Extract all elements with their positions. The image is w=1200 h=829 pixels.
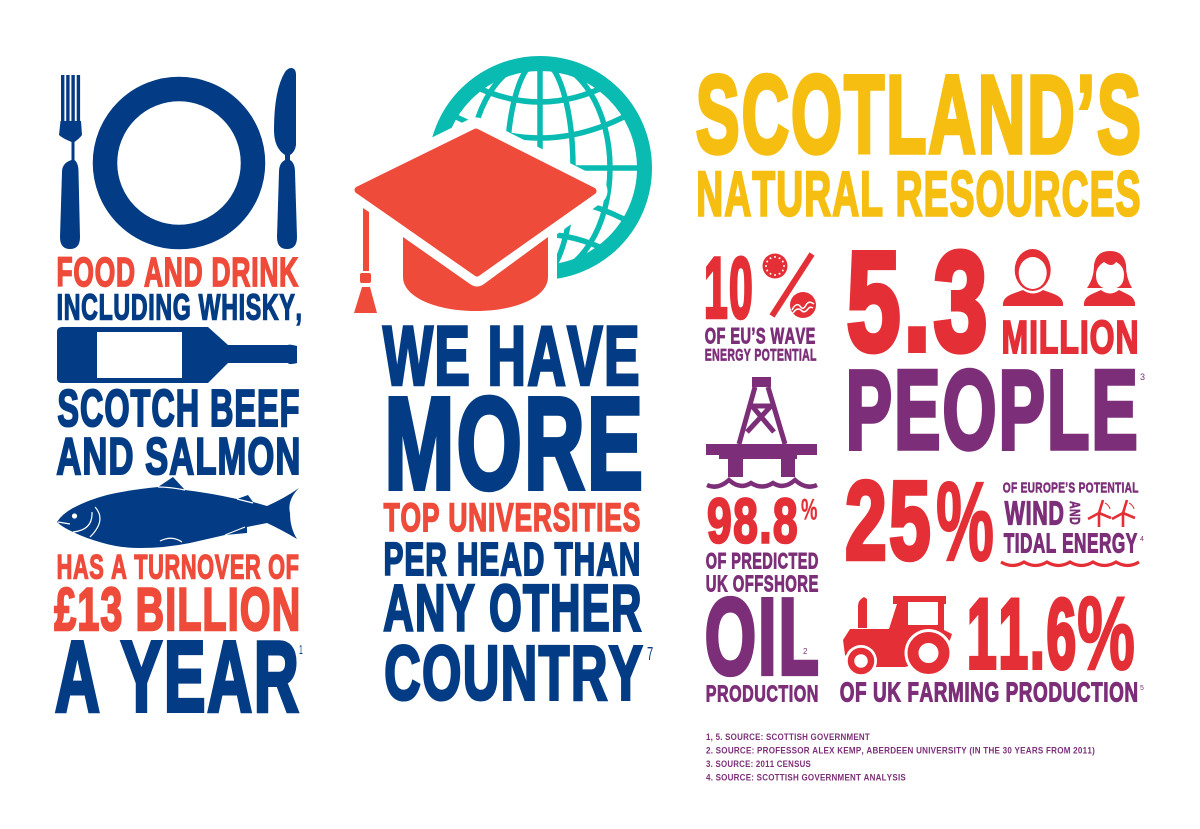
footnotes: 1, 5. SOURCE: SCOTTISH GOVERNMENT (706, 732, 870, 743)
icon: mortarboard (358, 132, 593, 273)
text: 98.8 percent: 98.8 (707, 487, 799, 557)
text: a year: A YEAR (55, 621, 301, 733)
text: oil: OIL (705, 576, 821, 697)
footnotes: 4. SOURCE: SCOTTISH GOVERNMENT ANALYSIS (706, 772, 906, 784)
footnote marker 3: 3 (1140, 372, 1145, 382)
text: of Europe's potential: OF EUROPE’S POTENTIAL (1003, 480, 1139, 497)
infographic canvas (54, 56, 1145, 780)
footnote marker 5: 5 (1140, 685, 1144, 692)
stat: offshore oil (705, 377, 821, 706)
text: any other: ANY OTHER (383, 571, 643, 645)
text: energy potential: ENERGY POTENTIAL (705, 347, 817, 365)
panel: natural resources (696, 53, 1145, 784)
icon: fork (59, 75, 82, 249)
panel: food and drink (54, 68, 303, 733)
text: of predicted: OF PREDICTED (706, 549, 819, 574)
icon: globe and graduation cap (354, 60, 650, 313)
footnotes (706, 732, 1095, 784)
text: 25 percent: % (936, 459, 996, 584)
text: UK offshore: UK OFFSHORE (706, 570, 819, 596)
icon: tractor (843, 596, 952, 677)
icon: salmon (57, 477, 299, 548)
icon: woman (1084, 251, 1135, 306)
text: 11.6 percent: % (1077, 576, 1137, 692)
text: per head than: PER HEAD THAN (384, 533, 641, 585)
icon: globe (430, 60, 650, 280)
stat: wind and tidal (845, 458, 1144, 584)
footnote marker 4: 4 (1140, 536, 1144, 543)
icon: man (1003, 249, 1063, 306)
icon: cap base (403, 237, 548, 311)
panel: top universities (354, 60, 654, 716)
text: scotch beef: SCOTCH BEEF (57, 380, 300, 438)
stat: wave energy: 10 (704, 240, 754, 336)
stat: wave energy (704, 240, 817, 365)
text: and: AND (1066, 501, 1083, 525)
text: 13 billion pounds: £13 BILLION (54, 575, 301, 643)
text: including whisky: INCLUDING WHISKY, (57, 287, 303, 327)
text: 25 percent: 25 (845, 458, 933, 583)
icon: oil rig (706, 377, 817, 487)
text: more: MORE (385, 370, 645, 516)
icon: plate (105, 89, 253, 237)
text: 5.3: 5.3 (846, 222, 990, 380)
footnotes: 3. SOURCE: 2011 CENSUS (706, 759, 811, 770)
text: million: MILLION (1002, 311, 1140, 363)
icon: wave line (1001, 562, 1139, 566)
icon: percent sign with EU stars and waves (762, 254, 816, 318)
text: country: COUNTRY (384, 630, 644, 716)
stat: farming (840, 576, 1144, 707)
footnotes: 2. SOURCE: PROFESSOR ALEX KEMP, ABERDEEN UNIVERSITY (IN THE 30 YEARS FROM 2011) (706, 746, 1095, 756)
icon: tassel (354, 208, 377, 313)
icon: wind turbines (1088, 500, 1135, 527)
icon: knife (274, 68, 297, 249)
text: 98.8 percent: % (801, 494, 818, 526)
text: we have: WE HAVE (383, 308, 641, 402)
icon: whisky bottle (57, 327, 297, 383)
footnote marker 2: 2 (803, 647, 808, 656)
stat: population (846, 222, 1145, 473)
text: food and drink: FOOD AND DRINK (56, 249, 299, 295)
footnote marker 1: 1 (299, 642, 303, 657)
text: and salmon: AND SALMON (56, 428, 301, 486)
text: of EU's wave: OF EU’S WAVE (705, 324, 816, 349)
text: production: PRODUCTION (706, 680, 819, 706)
text: has a turnover of: HAS A TURNOVER OF (57, 548, 300, 586)
text: 11.6 percent: 11.6 (967, 578, 1078, 689)
footnote marker 7: 7 (647, 644, 654, 664)
text: wind: WIND (1005, 494, 1065, 531)
text: top universities: TOP UNIVERSITIES (384, 496, 641, 540)
title (696, 53, 1143, 230)
